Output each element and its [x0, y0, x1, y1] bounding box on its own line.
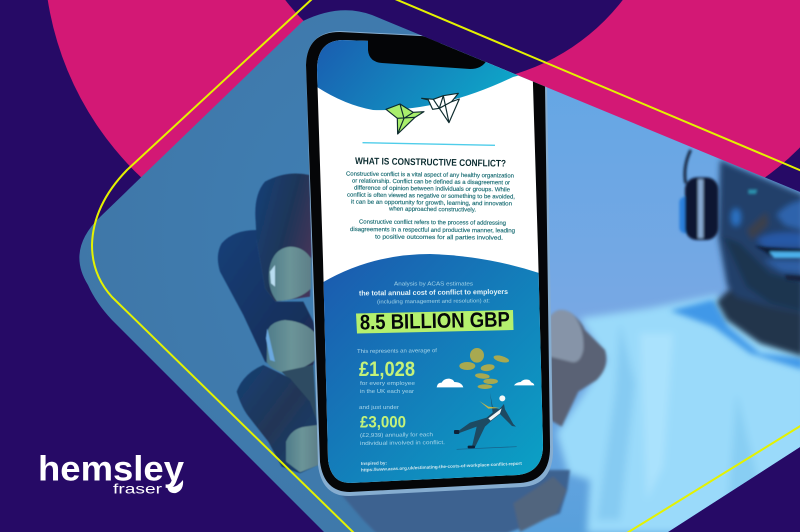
description text: Constructive conflict refers to the process of addressing: [359, 220, 506, 227]
per-employee stats: This represents an average of: [357, 348, 438, 355]
green bird: [386, 104, 424, 134]
coins: [459, 348, 510, 389]
headphones: [679, 150, 718, 240]
collar: [670, 299, 800, 370]
cost intro text: [359, 282, 508, 305]
per-employee stats: in the UK each year: [360, 389, 414, 395]
logo wordmark: hemsley: [38, 450, 185, 488]
per-employee stats: and just under: [359, 405, 399, 411]
face and neck: [717, 160, 800, 357]
headline figure: 8.5 BILLION GBP: [360, 308, 510, 334]
per-employee stats: [357, 348, 446, 447]
per-employee stats: individual involved in conflict.: [360, 440, 446, 447]
cost intro text: (including management and resolution) at:: [377, 298, 490, 305]
description text: difference of opinion between individuals or groups. While: [354, 186, 511, 193]
man figure: [454, 393, 517, 449]
finger: middle: [218, 230, 318, 372]
description text: or relationship. Conflict can be defined as a disagreement or: [352, 179, 510, 186]
shadow between fingers: [282, 365, 317, 422]
per-employee stats: £1,028: [359, 358, 415, 381]
phone notch: [368, 36, 495, 69]
source credit: Inspired by:: [361, 460, 388, 466]
cost intro text: Analysis by ACAS estimates: [394, 282, 473, 288]
description text: when approached constructively.: [388, 206, 476, 214]
lower hand and wrist: [320, 470, 570, 532]
falling man illustration: [437, 348, 534, 449]
logo: [38, 450, 185, 496]
divider line: [362, 143, 495, 145]
per-employee stats: for every employee: [360, 381, 415, 387]
section title: WHAT IS CONSTRUCTIVE CONFLICT?: [355, 156, 506, 170]
per-employee stats: £3,000: [360, 412, 406, 432]
mouth: [748, 189, 800, 282]
description text: conflict is often viewed as negative or something to be avoided,: [347, 193, 515, 201]
bottom blue panel: [320, 254, 545, 490]
logo smile: [167, 480, 183, 493]
finger: lower: [237, 365, 318, 473]
man with headphones: [670, 150, 800, 370]
thumb: [550, 310, 606, 427]
phone body: [306, 31, 553, 496]
finger: upper: [255, 173, 312, 302]
clouds: [437, 379, 534, 387]
cost intro text: the total annual cost of conflict to employers: [359, 289, 508, 297]
phone: [306, 30, 553, 496]
phone screen: [310, 30, 550, 490]
source credit: https://www.acas.org.uk/estimating-the-costs-of-workplace-conflict-report: [361, 461, 522, 472]
top blue wave: [317, 40, 518, 110]
shirt: [557, 295, 800, 532]
description text: Constructive conflict is a vital aspect of any healthy organization: [346, 172, 514, 180]
origami birds: [386, 93, 459, 134]
description text: it can be an opportunity for growth, learning, and innovation: [351, 200, 512, 207]
description text: disagreements in a respectful and productive manner, leading: [350, 227, 515, 234]
per-employee stats: (£2,939) annually for each: [360, 432, 433, 439]
white bird: [422, 93, 459, 123]
logo subline: fraser: [113, 480, 162, 496]
fingers: [218, 173, 319, 473]
description text: to positive outcomes for all parties involved.: [375, 235, 503, 242]
description text: [346, 172, 515, 242]
